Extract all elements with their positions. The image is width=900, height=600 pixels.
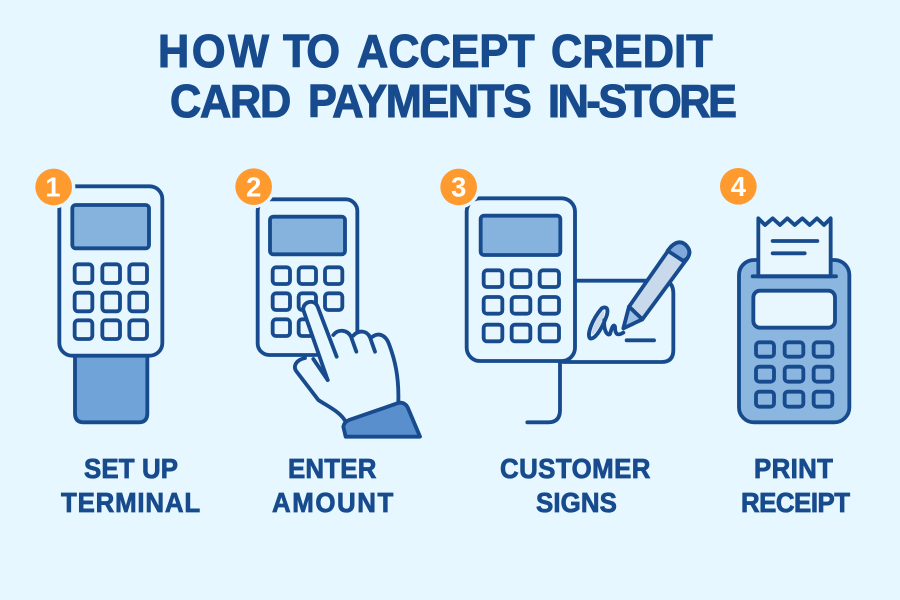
title: PAYMENTS: [308, 77, 532, 127]
number badge 1: 1: [45, 172, 61, 203]
icon: keypad, cord and signature card with pen: [437, 165, 689, 422]
step 3: customer signs: [437, 165, 689, 518]
label: enter amount: AMOUNT: [272, 487, 393, 518]
step 2: enter amount: [232, 165, 420, 518]
title: ACCEPT: [357, 27, 535, 77]
cuff: [343, 403, 420, 437]
title: CREDIT: [551, 27, 713, 77]
title: [158, 27, 737, 127]
label: set up terminal: TERMINAL: [61, 487, 200, 518]
title: TO: [283, 27, 340, 77]
signature card: [563, 281, 673, 362]
step 1: set up terminal: [32, 165, 200, 518]
label: print receipt: RECEIPT: [741, 487, 850, 518]
label: print receipt: PRINT: [754, 453, 833, 484]
title: CARD: [170, 77, 291, 127]
label: enter amount: ENTER: [288, 453, 376, 484]
icon: terminal printing receipt: [739, 218, 849, 422]
hand: [295, 303, 398, 422]
number badge 1: [35, 169, 72, 205]
step 4: print receipt: [720, 168, 850, 518]
pen: [629, 242, 689, 319]
number badge 3: 3: [451, 172, 466, 203]
icon: keypad with pressing hand: [232, 165, 420, 437]
cord: [527, 362, 560, 422]
number badge 4: 4: [731, 171, 747, 202]
label: set up terminal: SET UP: [84, 453, 178, 484]
number badge 4: [720, 168, 757, 205]
label: customer signs: CUSTOMER: [500, 453, 650, 484]
label: print receipt: [741, 453, 850, 518]
number badge 3: [440, 169, 477, 205]
number badge 2: 2: [246, 171, 261, 202]
number badge 2: [235, 168, 272, 205]
label: set up terminal: [61, 453, 200, 518]
signature: [592, 311, 604, 334]
icon: payment terminal with card base: [32, 165, 162, 422]
title: IN-STORE: [548, 77, 737, 127]
label: customer signs: SIGNS: [536, 487, 617, 518]
label: enter amount: [272, 453, 393, 518]
receipt: [758, 218, 831, 276]
label: customer signs: [500, 453, 650, 518]
title: HOW: [158, 27, 270, 77]
